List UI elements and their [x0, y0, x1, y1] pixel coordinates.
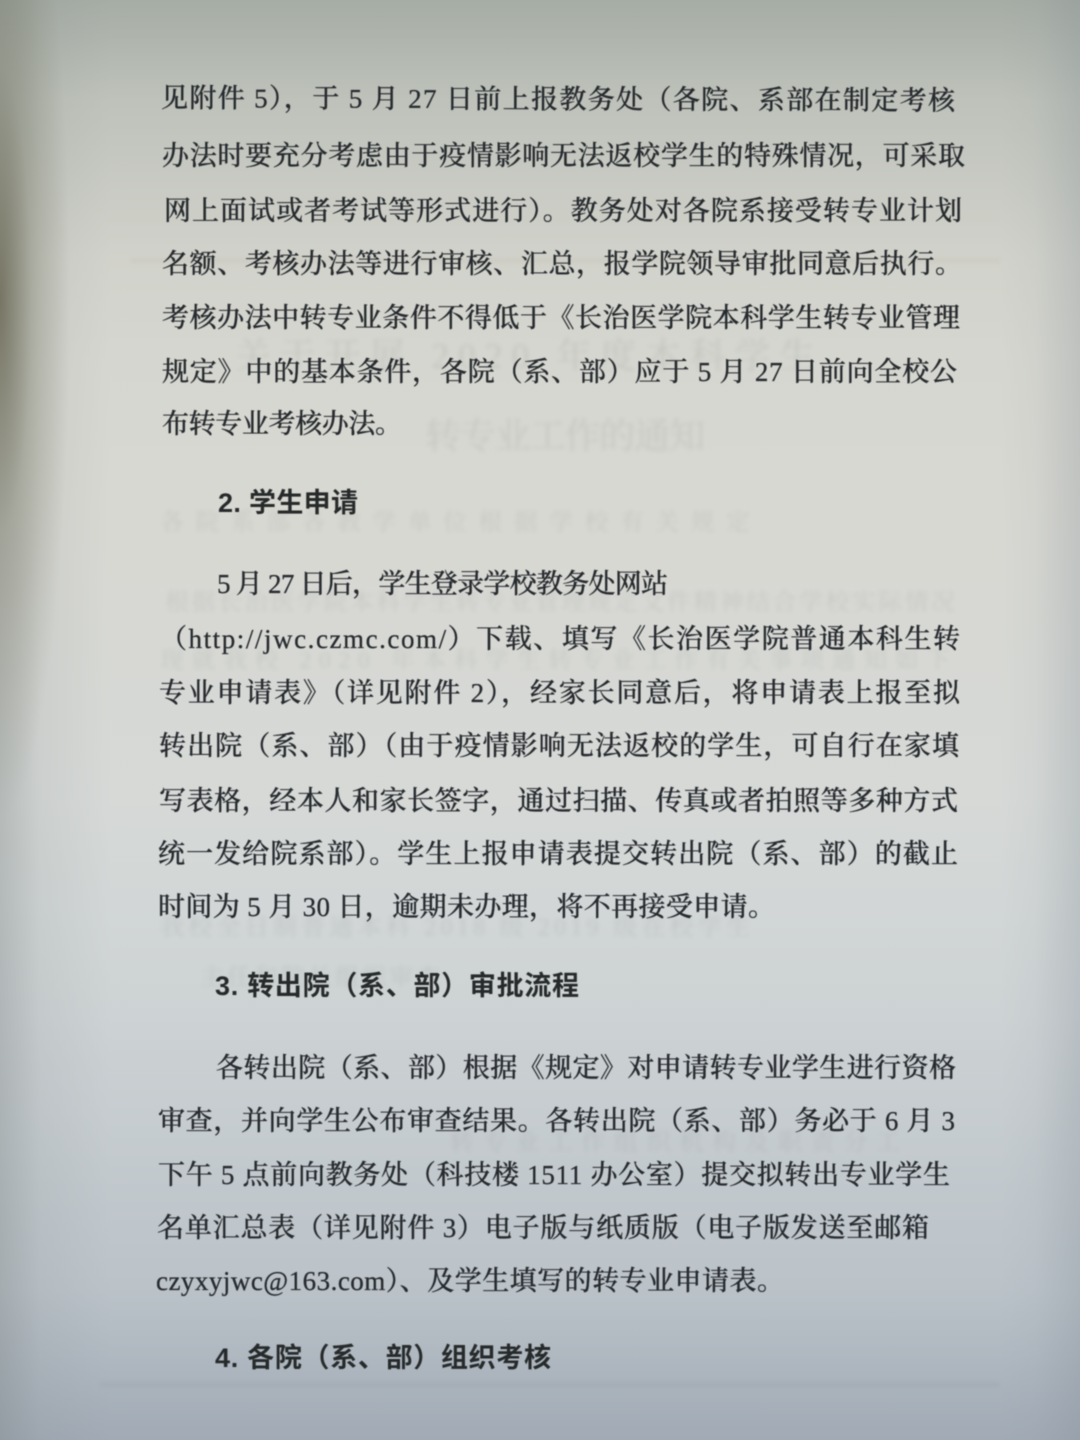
text block: approval process paragraph: 下午 5 点前向教务处（科技楼 1511 办公室）提交拟转出专业学生 [158, 1160, 950, 1190]
text block: approval process paragraph: 审查，并向学生公布审查结果。各转出院（系、部）务必于 6 月 3 [158, 1106, 955, 1136]
text block: approval process paragraph: 名单汇总表（详见附件 3）电子版与纸质版（电子版发送至邮箱 [157, 1213, 929, 1243]
text block: student application paragraph: 转出院（系、部）（由于疫情影响无法返校的学生，可自行在家填 [159, 731, 962, 761]
show-through text from the reverse page: 各院系部各教学单位根据学校有关规定 [160, 509, 750, 536]
text block: student application paragraph: 统一发给院系部）。学生上报申请表提交转出院（系、部）的截止 [158, 839, 958, 869]
text block: continuation paragraph: 规定》中的基本条件，各院（系、部）应于 5 月 27 日前向全校公 [162, 357, 957, 387]
crease lines in the paper [100, 258, 1000, 1387]
text block: student application paragraph: 5 月 27 日后，学生登录学校教务处网站 [217, 569, 668, 599]
text block: student application paragraph: 写表格，经本人和家长签字，通过扫描、传真或者拍照等多种方式 [159, 786, 958, 816]
text block: approval process paragraph: 各转出院（系、部）根据《规定》对申请转专业学生进行资格 [216, 1053, 956, 1083]
heading: 2. student application: 2. 学生申请 [218, 488, 358, 518]
text block: continuation paragraph [161, 83, 965, 439]
show-through text from the reverse page: 根据长治医学院本科学生转专业管理规定文件精神结合学校实际情况 [165, 589, 955, 616]
text block: student application paragraph: 专业申请表》（详见附件 2），经家长同意后，将申请表上报至拟 [159, 678, 961, 708]
text block: continuation paragraph: 布转专业考核办法。 [162, 409, 402, 439]
text block: continuation paragraph: 网上面试或者考试等形式进行）。教务处对各院系接受转专业计划 [164, 196, 962, 226]
show-through text from the reverse page [160, 336, 955, 1156]
text block: continuation paragraph: 考核办法中转专业条件不得低于《长治医学院本科学生转专业管理 [162, 303, 960, 333]
text block: approval process paragraph: czyxyjwc@163.com）、及学生填写的转专业申请表。 [156, 1266, 784, 1296]
text block: approval process paragraph [156, 1053, 956, 1296]
text block: continuation paragraph: 见附件 5），于 5 月 27 日前上报教务处（各院、系部在制定考核 [161, 83, 956, 116]
text block: continuation paragraph: 名额、考核办法等进行审核、汇总，报学院领导审批同意后执行。 [162, 249, 962, 279]
heading: 4. department assessment: 4. 各院（系、部）组织考核 [215, 1343, 551, 1373]
text block: student application paragraph: 时间为 5 月 30 日，逾期未办理，将不再接受申请。 [158, 892, 775, 922]
show-through text from the reverse page: 转专业工作的通知 [425, 416, 705, 456]
show-through text from the reverse page: 转专业工作组织机构及职责分工 [450, 1129, 900, 1156]
show-through text from the reverse page: 关于开展 2020 年度本科学生 [235, 336, 815, 376]
text block: student application paragraph: （http://jwc.czmc.com/）下载、填写《长治医学院普通本科生转 [160, 624, 960, 654]
show-through text from the reverse page: 主任和院长组织审查 [200, 964, 440, 991]
heading: 3. transfer-out approval process: 3. 转出院（系、部）审批流程 [215, 971, 579, 1001]
show-through text from the reverse page: 现就我校 2020 年本科学生转专业工作有关事项通知如下 [160, 647, 950, 674]
text block: continuation paragraph: 办法时要充分考虑由于疫情影响无法返校学生的特殊情况，可采取 [162, 141, 965, 171]
text block: student application paragraph [158, 569, 962, 922]
show-through text from the reverse page: 我校全日制普通本科 2018 级 2019 级在校学生 [160, 914, 750, 941]
